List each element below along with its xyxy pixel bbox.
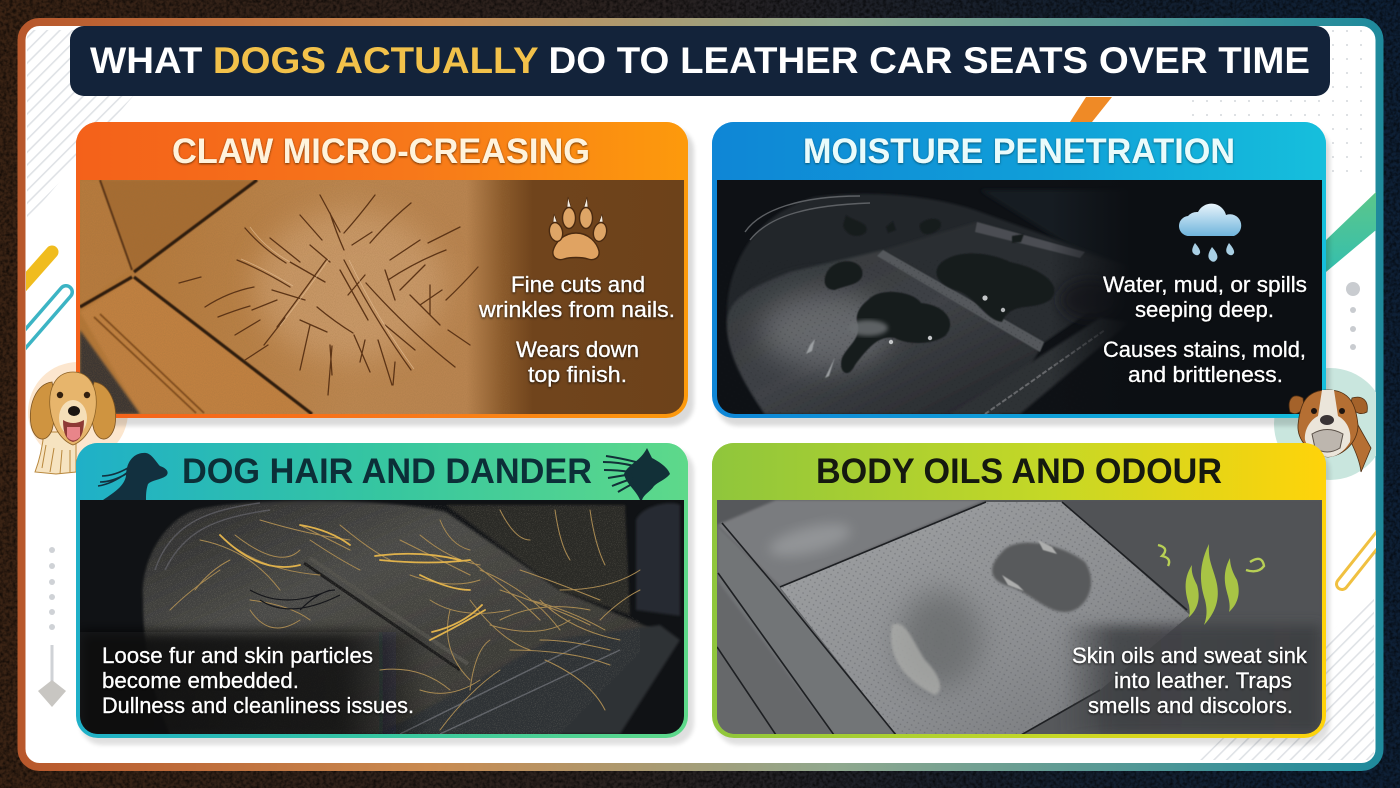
panel 2 description: Causes stains, mold, [1103,337,1306,362]
panel 1 header [76,122,688,180]
title text: WHAT DOGS ACTUALLY DO TO LEATHER CAR SEATS OVER TIME [90,40,1310,81]
panel 1 header: CLAW MICRO-CREASING [172,132,590,171]
fur strands [170,510,640,730]
panel 3 photo: fur covered seat [80,500,684,742]
panel 2 description: seeping deep. [1135,297,1274,322]
panel 1 description: wrinkles from nails. [478,297,675,322]
icon: rain cloud [1179,204,1241,262]
panel 3 description: become embedded. [102,668,299,693]
panel 2 description [1103,272,1307,387]
panel 3 description [102,643,414,718]
panel 4 photo: stained grey seat [717,500,1322,735]
icon: dog silhouette [98,453,168,500]
panel 4 description: into leather. Traps [1114,668,1292,693]
icon: golden retriever mascot [30,372,116,474]
panel 3 header [76,443,688,500]
panel 4 description: Skin oils and sweat sink [1072,643,1308,668]
panel 4 description: smells and discolors. [1088,693,1293,718]
panel 4 header [712,443,1326,500]
icon: wolf silhouette [603,448,670,500]
panel 2 description: Water, mud, or spills [1103,272,1307,297]
panel 1 photo: scratched tan leather [80,180,684,414]
panel 1 description: Wears down [516,337,639,362]
arrow: left margin down arrow [38,645,66,707]
panel 1 description: Fine cuts and [511,272,645,297]
panel 4 description [1072,643,1308,718]
panel: moisture penetration [712,122,1330,426]
water stains [825,215,1054,373]
title bar [70,26,1330,96]
text shade [80,632,430,742]
panel 2 photo: wet dark seat [717,180,1322,414]
panel 1 description: top finish. [528,362,627,387]
panel 3 header: DOG HAIR AND DANDER [182,452,592,491]
icon: bulldog mascot [1289,390,1371,472]
panel 1 description [478,272,675,387]
panel 3 description: Loose fur and skin particles [102,643,373,668]
icon: odour waves [1158,544,1264,625]
panel 2 header [712,122,1326,180]
panel: body oils and odour [712,443,1330,745]
panel 2 header: MOISTURE PENETRATION [803,132,1235,171]
icon: paw with claws [548,197,608,260]
claw scratches [179,195,478,395]
panel 2 description: and brittleness. [1128,362,1283,387]
oil stains [898,590,982,690]
panel 4 header: BODY OILS AND ODOUR [816,452,1222,491]
panel: claw micro-creasing [76,122,694,426]
panel 3 description: Dullness and cleanliness issues. [102,693,414,718]
panel: dog hair and dander [76,443,694,745]
